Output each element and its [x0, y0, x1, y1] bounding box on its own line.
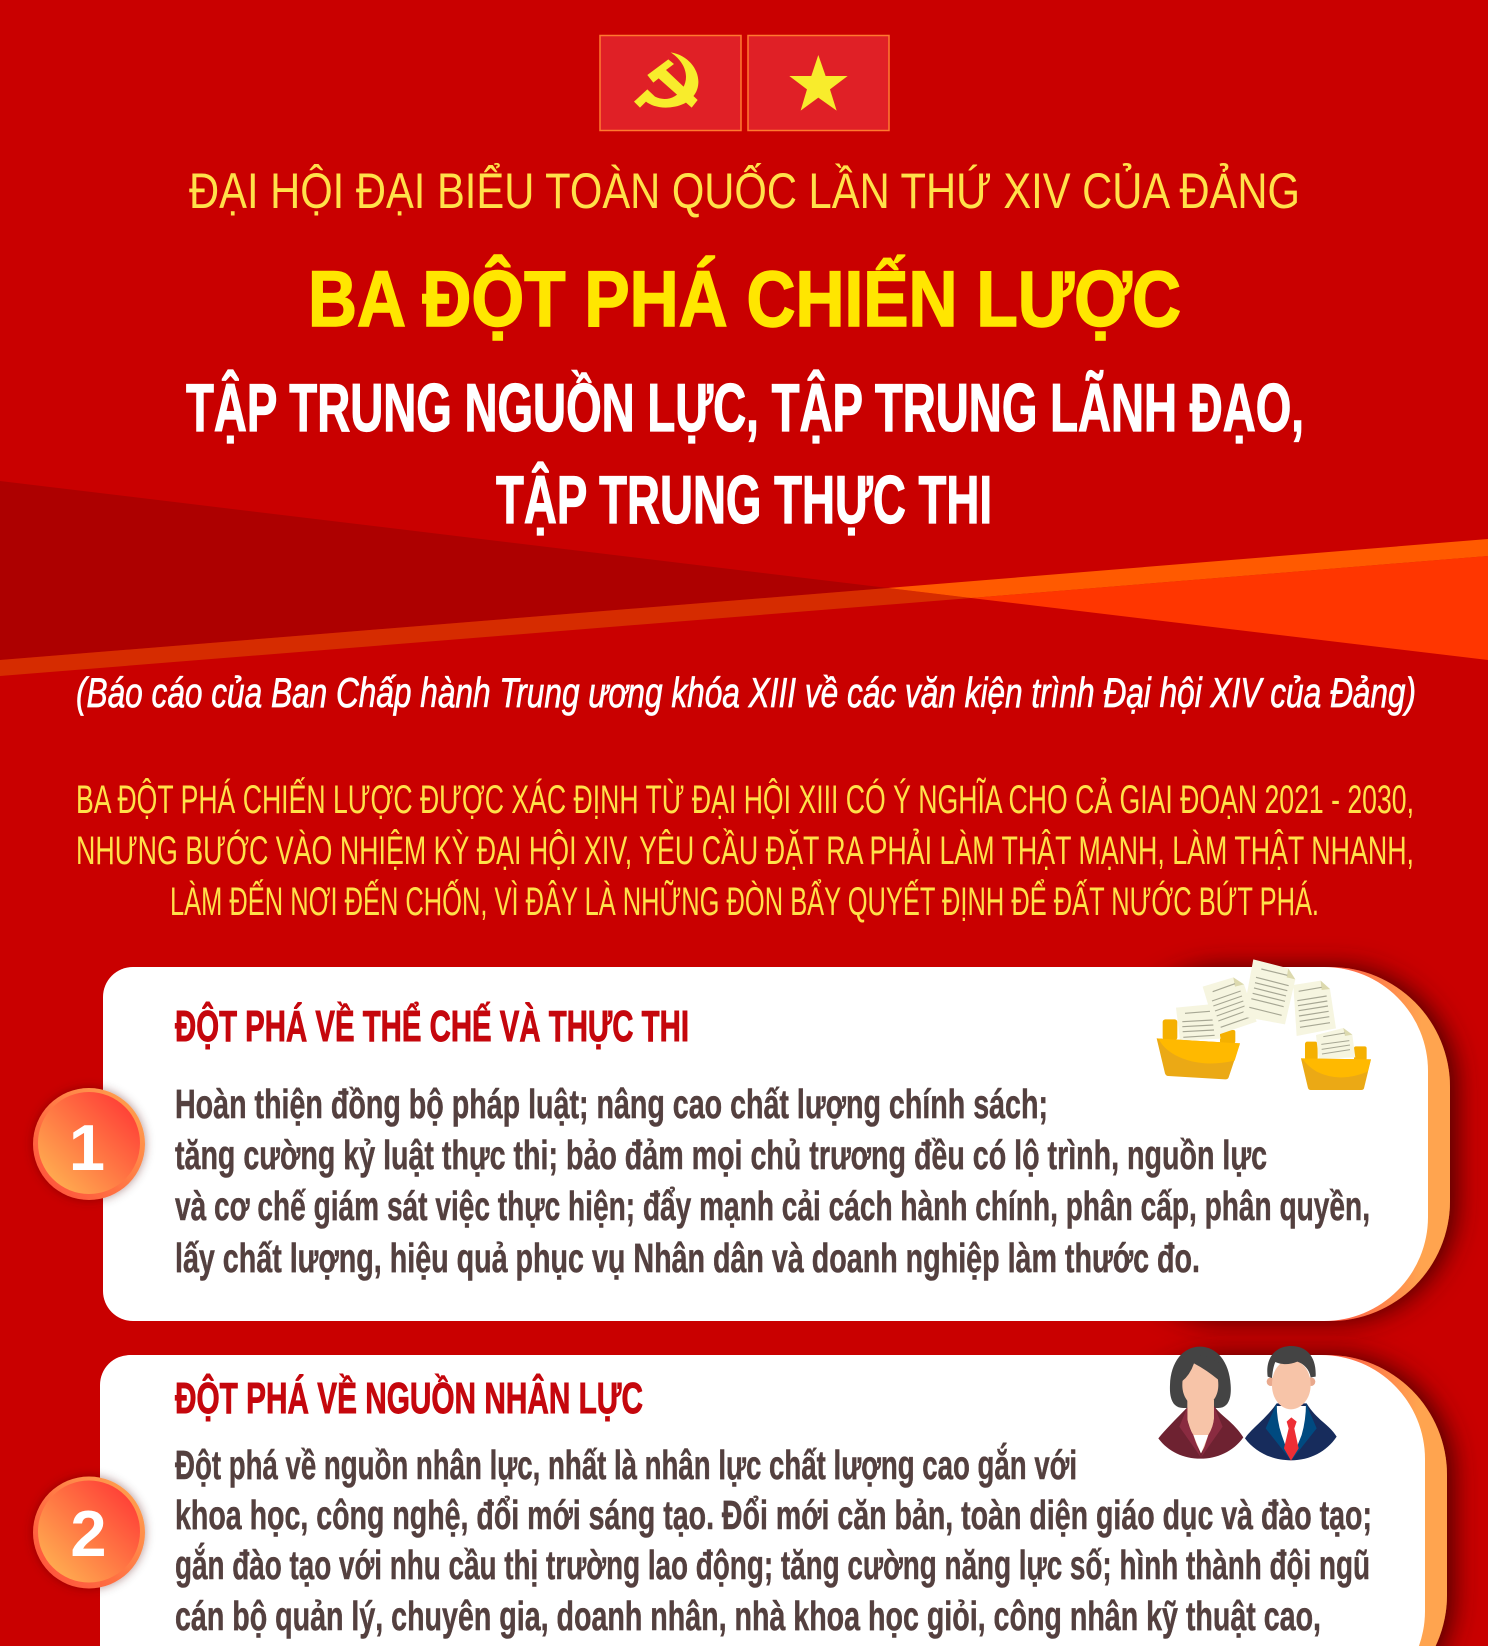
- card 2 body text: [175, 1442, 1372, 1639]
- card 1 body text: Hoàn thiện đồng bộ pháp luật; nâng cao chất lượng chính sách;: [175, 1081, 1048, 1127]
- decorative diagonal bands: [0, 481, 1488, 676]
- card 2 heading: ĐỘT PHÁ VỀ NGUỒN NHÂN LỰC: [175, 1372, 643, 1423]
- card 2 background: [100, 1355, 1447, 1646]
- number badge 1: 1: [69, 1111, 105, 1184]
- panel: breakthrough 1: [33, 959, 1450, 1321]
- panel: breakthrough 2: [33, 1346, 1447, 1646]
- number badge 1: [33, 1088, 145, 1200]
- icon: folders and documents: [1157, 959, 1371, 1090]
- icon: woman and man officials: [1158, 1346, 1337, 1461]
- event heading: ĐẠI HỘI ĐẠI BIỂU TOÀN QUỐC LẦN THỨ XIV CỦA ĐẢNG: [189, 162, 1300, 219]
- icon: party flag with hammer and sickle: [600, 36, 741, 130]
- intro paragraph: [76, 776, 1414, 924]
- number badge 2: [33, 1476, 145, 1588]
- subtitle: [186, 369, 1304, 538]
- main title: BA ĐỘT PHÁ CHIẾN LƯỢC: [308, 254, 1181, 343]
- card 2 body text: Đột phá về nguồn nhân lực, nhất là nhân lực chất lượng cao gắn với: [175, 1442, 1077, 1488]
- card 1 body text: [175, 1081, 1370, 1281]
- icon: national flag with star: [748, 36, 889, 130]
- number badge 2: 2: [70, 1497, 107, 1570]
- subtitle: TẬP TRUNG THỰC THI: [496, 461, 992, 538]
- card 1 heading: ĐỘT PHÁ VỀ THỂ CHẾ VÀ THỰC THI: [175, 1000, 689, 1051]
- card 1 background: [103, 967, 1450, 1321]
